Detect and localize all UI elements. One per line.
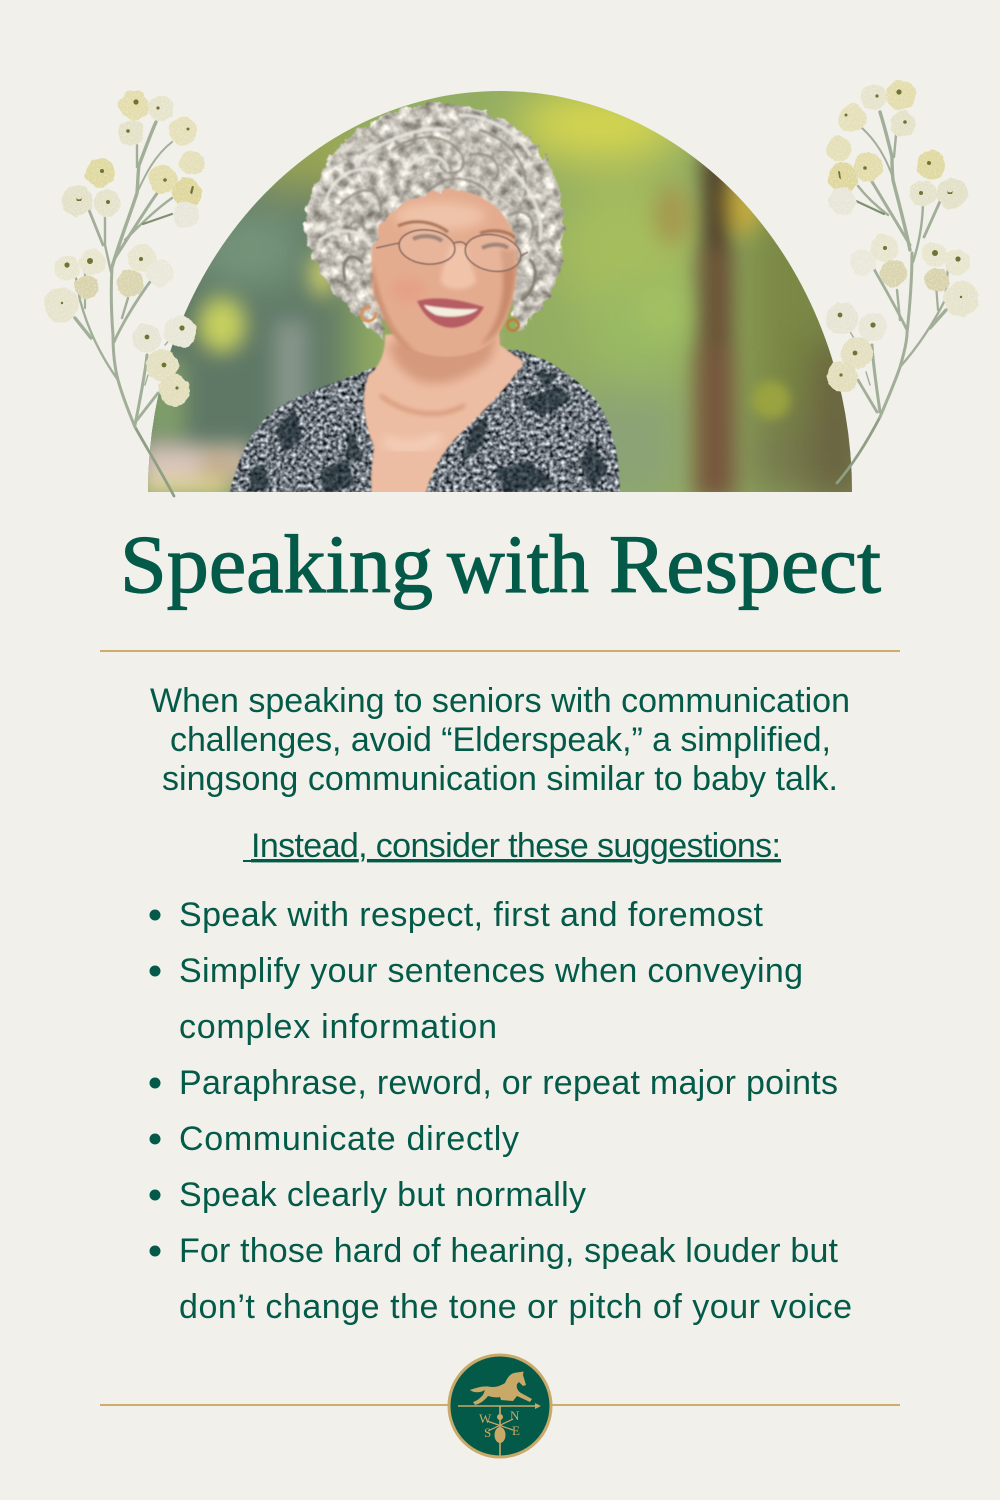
bullet 1: Speak with respect, first and foremost xyxy=(179,896,764,934)
bullet 6: For those hard of hearing, speak louder but xyxy=(179,1232,839,1270)
left blossom centres xyxy=(61,99,194,390)
title: with xyxy=(447,518,589,610)
eyebrows xyxy=(398,222,515,238)
right stems xyxy=(837,112,948,483)
eyes xyxy=(413,236,508,248)
intro paragraph xyxy=(150,682,850,798)
title xyxy=(120,518,881,610)
bullet 2 xyxy=(150,952,803,1046)
photo background: blurred park xyxy=(148,91,852,492)
earrings xyxy=(362,307,518,330)
footer divider xyxy=(100,1404,900,1406)
icon: compass: S xyxy=(484,1425,491,1440)
intro paragraph: singsong communication similar to baby talk. xyxy=(162,760,838,798)
right blossoms xyxy=(826,80,978,392)
photo: smiling senior woman in arch xyxy=(148,91,852,492)
intro paragraph: challenges, avoid “Elderspeak,” a simplified, xyxy=(170,721,831,759)
bullet 6: don’t change the tone or pitch of your voice xyxy=(179,1288,852,1326)
right blossom centres xyxy=(838,89,962,377)
bullet 2: Simplify your sentences when conveying xyxy=(179,952,803,990)
subheading: Instead, consider these suggestions: xyxy=(251,827,781,865)
title: Respect xyxy=(609,518,881,610)
woman xyxy=(229,104,620,495)
face xyxy=(362,188,528,357)
intro paragraph: When speaking to seniors with communication xyxy=(150,682,850,720)
bullet 2: complex information xyxy=(179,1008,497,1046)
title: Speaking xyxy=(120,518,433,610)
title divider xyxy=(100,650,900,652)
hair front curls xyxy=(308,104,541,305)
neck and chest xyxy=(364,320,524,495)
icon: compass: E xyxy=(512,1423,520,1438)
bullet 5: Speak clearly but normally xyxy=(179,1176,586,1214)
right floral branch xyxy=(826,80,978,483)
logo: horse weathervane badge xyxy=(449,1355,551,1457)
hair back layer xyxy=(306,104,564,340)
blouse xyxy=(229,350,620,495)
nose xyxy=(441,245,476,289)
bullet 3: Paraphrase, reword, or repeat major points xyxy=(179,1064,838,1102)
mouth xyxy=(417,298,484,328)
icon: arrow xyxy=(458,1403,541,1409)
icon: horse xyxy=(470,1372,532,1405)
bullet 6 xyxy=(150,1232,852,1326)
left stems xyxy=(75,122,174,496)
glasses xyxy=(376,227,528,276)
icon: compass: W xyxy=(479,1411,492,1426)
left blossoms xyxy=(44,90,204,406)
left floral branch xyxy=(44,90,204,496)
icon: compass xyxy=(479,1406,520,1457)
icon: compass: N xyxy=(510,1408,520,1423)
suggestions list xyxy=(150,896,852,1326)
bullet 4: Communicate directly xyxy=(179,1120,519,1158)
